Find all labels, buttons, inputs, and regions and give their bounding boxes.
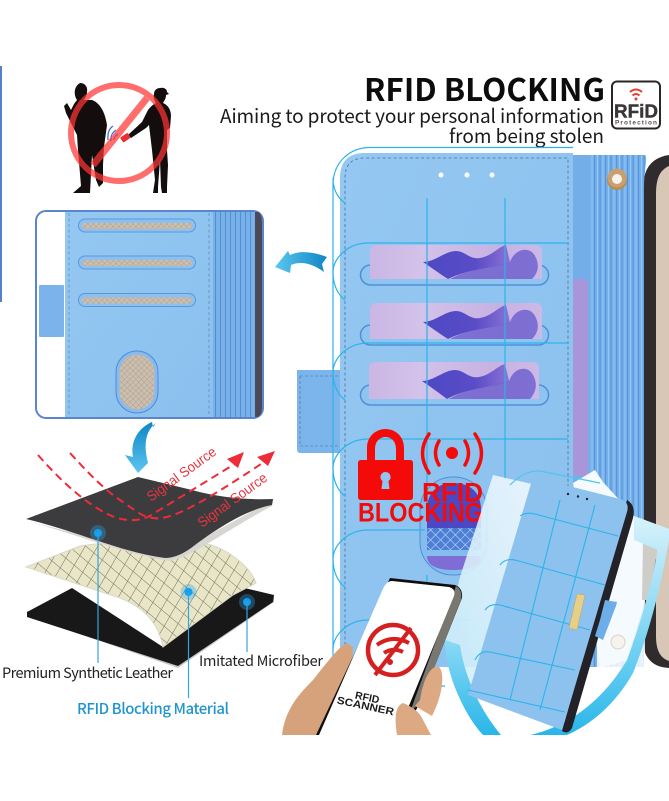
spine white fade <box>597 530 645 667</box>
text: RFID SCANNER <box>336 690 395 718</box>
text: RFID BLOCKING red stamp: BLOCKING <box>358 498 483 528</box>
callout: microfiber <box>239 594 255 652</box>
subheading: Aiming to protect your personal information <box>220 102 604 129</box>
silhouette: man <box>64 83 107 193</box>
bottom layer: microfiber <box>27 587 274 668</box>
phone edge <box>255 212 262 417</box>
shield top arc <box>510 471 600 485</box>
label: signal source 1: Signal Source <box>143 443 219 504</box>
bottom oval window <box>420 477 487 575</box>
label: premium synthetic leather: Premium Synthetic Leather <box>2 662 173 683</box>
callout: blocking material <box>180 584 196 698</box>
label: RFID blocking material: RFID Blocking Material <box>77 698 229 719</box>
heading: RFID BLOCKING <box>364 65 605 110</box>
purple strip <box>573 279 588 476</box>
text: RFID SCANNER: SCANNER <box>336 695 395 718</box>
grey window <box>642 540 658 600</box>
middle layer: blocking material <box>26 540 256 647</box>
panel: wallet inside detail <box>36 211 263 418</box>
shield right band <box>530 516 669 735</box>
subheading <box>220 102 604 149</box>
wallet spine <box>590 155 646 667</box>
hand fingers <box>396 667 442 735</box>
wallet dark edge <box>562 500 634 732</box>
grommet <box>607 168 627 190</box>
red card <box>120 133 131 143</box>
card slot 1 <box>78 219 196 232</box>
wallet spine plain section <box>573 155 590 667</box>
shield left band <box>445 640 501 735</box>
prohibition ring <box>71 85 167 181</box>
left edge accent bar <box>0 66 2 302</box>
silhouette: woman <box>128 88 171 193</box>
icon: no wifi <box>368 625 418 675</box>
text: RFID SCANNER: RFID <box>354 690 381 706</box>
gold clasp <box>569 594 585 630</box>
icon: red padlock <box>358 429 413 500</box>
cyan grid lines <box>333 148 573 690</box>
oval window <box>116 351 158 413</box>
text: RFID BLOCKING red stamp <box>358 478 483 528</box>
phone body <box>316 578 462 735</box>
phone screen <box>656 166 669 661</box>
label: imitated microfiber: Imitated Microfiber <box>199 650 323 671</box>
label: signal source 2: Signal Source <box>194 469 270 530</box>
callout: leather <box>90 525 106 663</box>
text: RFID BLOCKING red stamp: RFID <box>422 478 483 508</box>
diagram: material layers <box>26 443 275 698</box>
wallet inner body <box>65 212 213 417</box>
white grommet <box>611 635 625 649</box>
card slot 3 <box>78 294 196 306</box>
small wallet with shield <box>445 470 669 735</box>
photo: open wallet <box>297 148 669 690</box>
hand back <box>282 643 353 735</box>
phone at right <box>643 155 669 668</box>
top layer: leather <box>26 477 273 561</box>
card slot 3 <box>360 362 548 405</box>
wallet grid lines <box>468 500 618 712</box>
phone screen <box>319 581 454 735</box>
badge: RFID protection: Protection <box>615 120 657 126</box>
badge: RFID protection: RFiD <box>614 102 658 122</box>
wallet tab <box>595 600 617 640</box>
signal paths <box>38 453 270 520</box>
card slot 2 <box>360 303 548 345</box>
translucent back panel <box>445 475 532 695</box>
three dots <box>438 172 494 178</box>
arrow: toward detail panel <box>275 251 327 273</box>
wallet body <box>468 477 628 730</box>
arrow: down to layers <box>125 422 156 473</box>
subheading: from being stolen <box>449 122 604 149</box>
wallet spine <box>213 212 255 417</box>
wallet front body <box>340 153 573 667</box>
icon: RFID theft prohibited <box>64 83 171 193</box>
phone: RFID scanner in hand <box>282 578 462 735</box>
signal waves <box>108 126 118 141</box>
translucent top panel <box>573 470 669 668</box>
card slot 1 <box>360 245 548 285</box>
wallet tab <box>297 370 340 453</box>
signal arrowheads <box>227 451 275 468</box>
card slot 2 <box>78 256 196 269</box>
badge: RFID protection <box>612 82 660 128</box>
wallet dots <box>567 493 588 500</box>
wallet clasp tab <box>39 285 64 337</box>
icon: red signal broadcast <box>422 434 482 473</box>
